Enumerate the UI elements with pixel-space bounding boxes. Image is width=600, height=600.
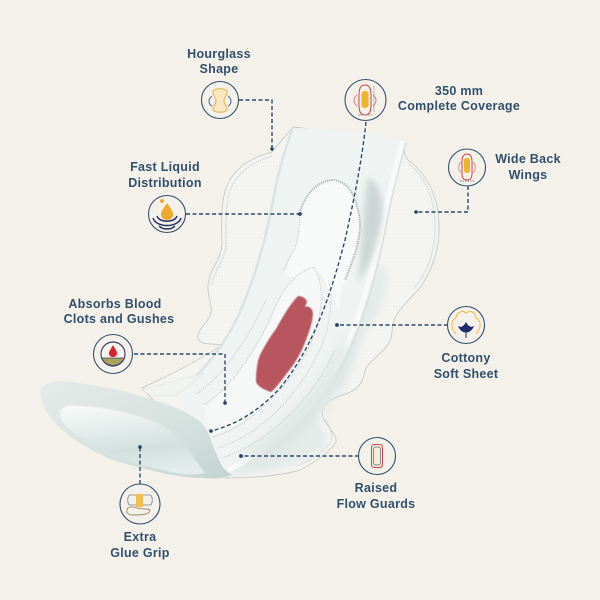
label: wide back wings: Wide Back xyxy=(495,152,561,166)
label: hourglass shape: Hourglass xyxy=(187,47,251,61)
lower right shaded fold xyxy=(226,262,387,476)
soft shadows xyxy=(358,178,383,282)
wings and back sheet xyxy=(142,127,439,478)
leader: complete coverage xyxy=(209,122,366,433)
front lobe cushion xyxy=(60,406,205,474)
main body xyxy=(178,128,403,474)
label: fast liquid distribution: Distribution xyxy=(128,176,202,190)
leader: raised flow guards xyxy=(239,454,359,458)
upper core lobe xyxy=(287,180,360,312)
blood stain xyxy=(256,296,313,392)
label: raised flow guards: Flow Guards xyxy=(337,497,415,511)
leader: hourglass shape xyxy=(239,100,274,151)
icon: fast liquid xyxy=(148,196,186,232)
lower core lobe xyxy=(204,267,322,436)
back end flap xyxy=(142,373,205,396)
label: 350 mm complete coverage: Complete Coverage xyxy=(398,99,520,113)
label: cottony soft sheet: Cottony xyxy=(441,351,491,365)
icon: extra glue grip xyxy=(120,484,160,524)
icon: raised flow guards xyxy=(358,438,396,474)
label: 350 mm complete coverage: 350 mm xyxy=(435,84,483,98)
leader: fast liquid distribution xyxy=(186,212,302,216)
label: extra glue grip: Extra xyxy=(124,530,157,544)
label: raised flow guards: Raised xyxy=(355,481,397,495)
icon: wide back wings xyxy=(448,149,486,186)
front lobe rim xyxy=(40,381,232,479)
label: wide back wings: Wings xyxy=(509,168,547,182)
label: fast liquid distribution: Fast Liquid xyxy=(130,160,200,174)
label: extra glue grip: Glue Grip xyxy=(110,546,170,560)
icon: absorbs blood clots xyxy=(94,334,132,374)
leader: absorbs blood clots xyxy=(134,354,227,405)
label: hourglass shape: Shape xyxy=(200,62,238,76)
leader: cottony soft sheet xyxy=(335,323,448,327)
leader: extra glue grip xyxy=(138,445,142,484)
icon: cottony sheet xyxy=(448,306,484,344)
icon: 350 mm coverage xyxy=(345,80,386,120)
sanitary pad illustration xyxy=(40,127,439,479)
label: absorbs blood clots: Clots and Gushes xyxy=(64,312,174,326)
label: cottony soft sheet: Soft Sheet xyxy=(434,367,499,381)
leader: wide back wings xyxy=(414,186,468,214)
icon: hourglass shape xyxy=(202,82,238,118)
label: absorbs blood clots: Absorbs Blood xyxy=(68,297,162,311)
